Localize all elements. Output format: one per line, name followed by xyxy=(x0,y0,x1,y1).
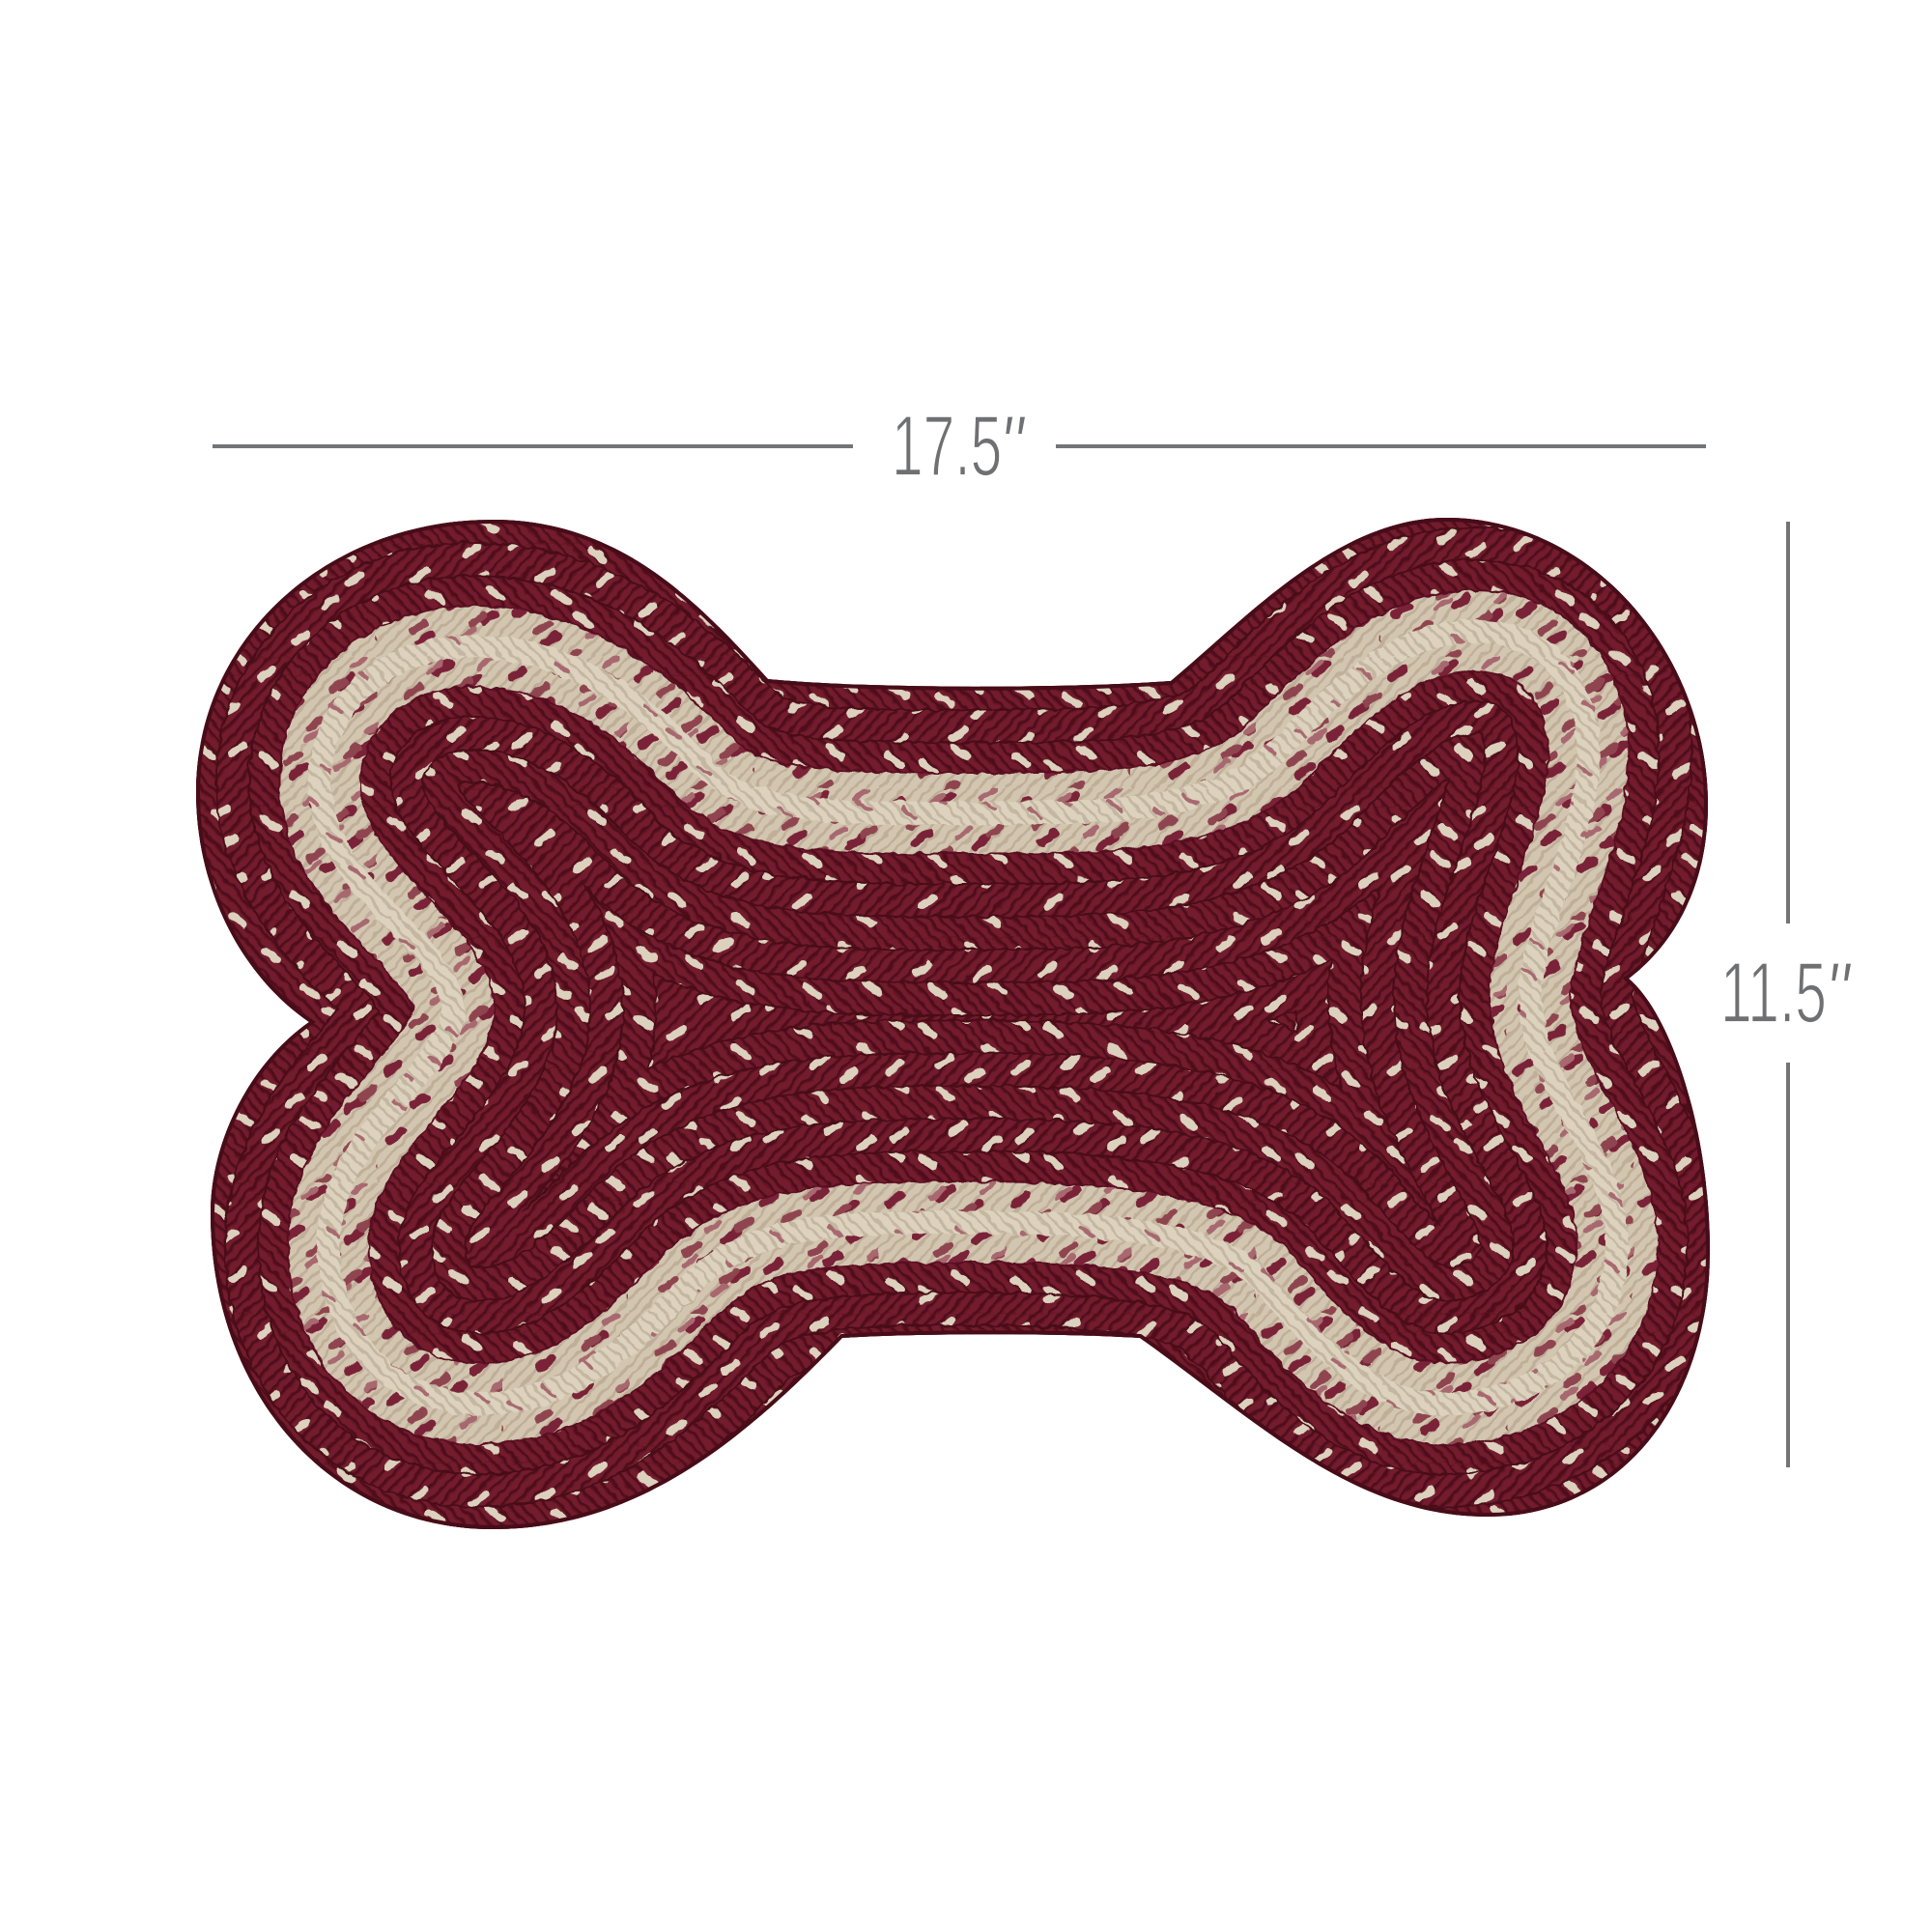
dimension line: height xyxy=(1786,522,1790,1467)
label: height 11.5 inches: " xyxy=(1825,945,1852,1041)
label: height 11.5 inches: 11.5 xyxy=(1720,945,1827,1040)
label: width 17.5 inches: " xyxy=(999,398,1026,495)
rug: braided bone-shaped mat xyxy=(196,518,1710,1529)
rug cream band xyxy=(320,631,1617,1404)
rug outer edge shading xyxy=(196,518,1710,1529)
label: width 17.5 inches: 17.5 xyxy=(892,398,1002,494)
rug concentric burgundy braid rows xyxy=(320,631,1617,1404)
dimension line: width xyxy=(213,444,1706,448)
